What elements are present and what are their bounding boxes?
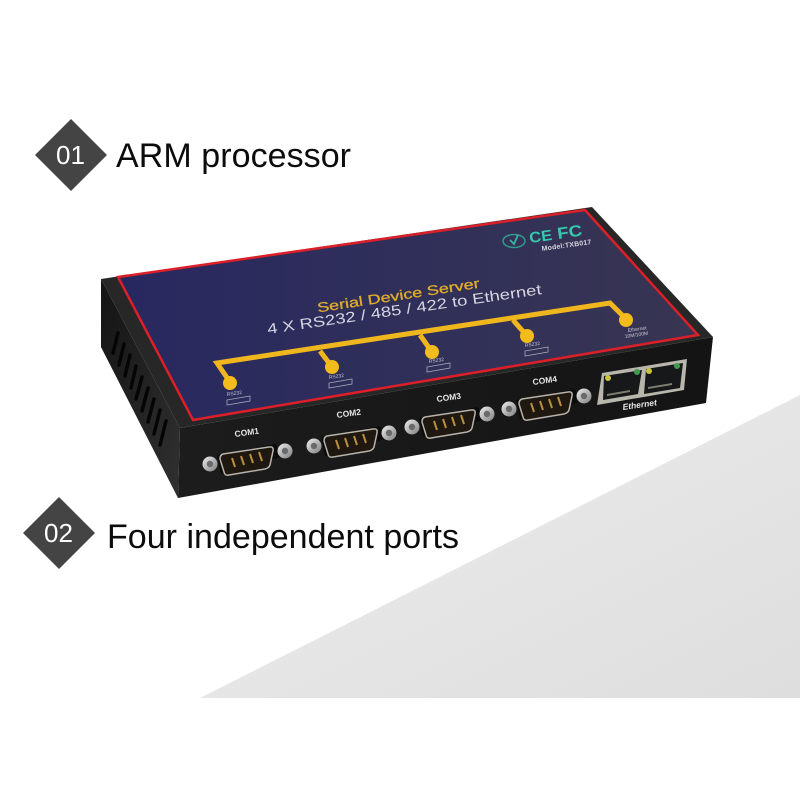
- port markers on panel: Ethernet: [627, 325, 648, 334]
- heading: Four independent ports: Four independent ports: [107, 518, 459, 556]
- connector COM2: [306, 407, 396, 457]
- heading: ARM processor: ARM processor: [116, 137, 351, 175]
- icon: diamond 01: [35, 119, 107, 191]
- ethernet ports: [597, 359, 687, 412]
- device left side with vents: [101, 279, 180, 498]
- port markers on panel: RS232: [428, 357, 445, 365]
- certification marks: [503, 223, 584, 248]
- badge: 02 Four independent ports: [23, 497, 459, 569]
- title: Serial Device Server: Serial Device Server: [316, 276, 481, 315]
- connector COM3: [404, 391, 494, 438]
- certification marks: CE: [528, 227, 553, 247]
- connector COM1: COM1: [234, 426, 260, 439]
- icon: diamond 02: 02: [44, 518, 73, 548]
- yellow bus diagram: [217, 303, 633, 390]
- port markers on panel: [226, 325, 649, 405]
- device top lid: [101, 207, 713, 428]
- badge: 01 ARM processor: [35, 119, 351, 191]
- subtitle: 4 X RS232 / 485 / 422 to Ethernet: 4 X RS232 / 485 / 422 to Ethernet: [266, 282, 543, 338]
- ethernet ports: Ethernet: [622, 397, 659, 412]
- port markers on panel: RS232: [226, 390, 243, 398]
- device front face: [178, 337, 713, 498]
- port markers on panel: RS232: [328, 373, 345, 381]
- connector COM1: [202, 426, 292, 475]
- top label panel with red border: [118, 210, 698, 420]
- port markers on panel: RS232: [524, 341, 541, 349]
- model number: Model:TXB017: [541, 239, 592, 253]
- device: serial device server: [101, 207, 713, 498]
- connector COM4: COM4: [532, 374, 558, 387]
- background diagonal grey band: [200, 395, 800, 698]
- connector COM4: [502, 374, 592, 420]
- connector COM2: COM2: [336, 407, 362, 420]
- port markers on panel: 10M/100M: [624, 331, 649, 340]
- icon: diamond 02: [23, 497, 95, 569]
- certification marks: FC: [556, 223, 584, 243]
- icon: diamond 01: 01: [56, 140, 85, 170]
- connector COM3: COM3: [436, 391, 462, 404]
